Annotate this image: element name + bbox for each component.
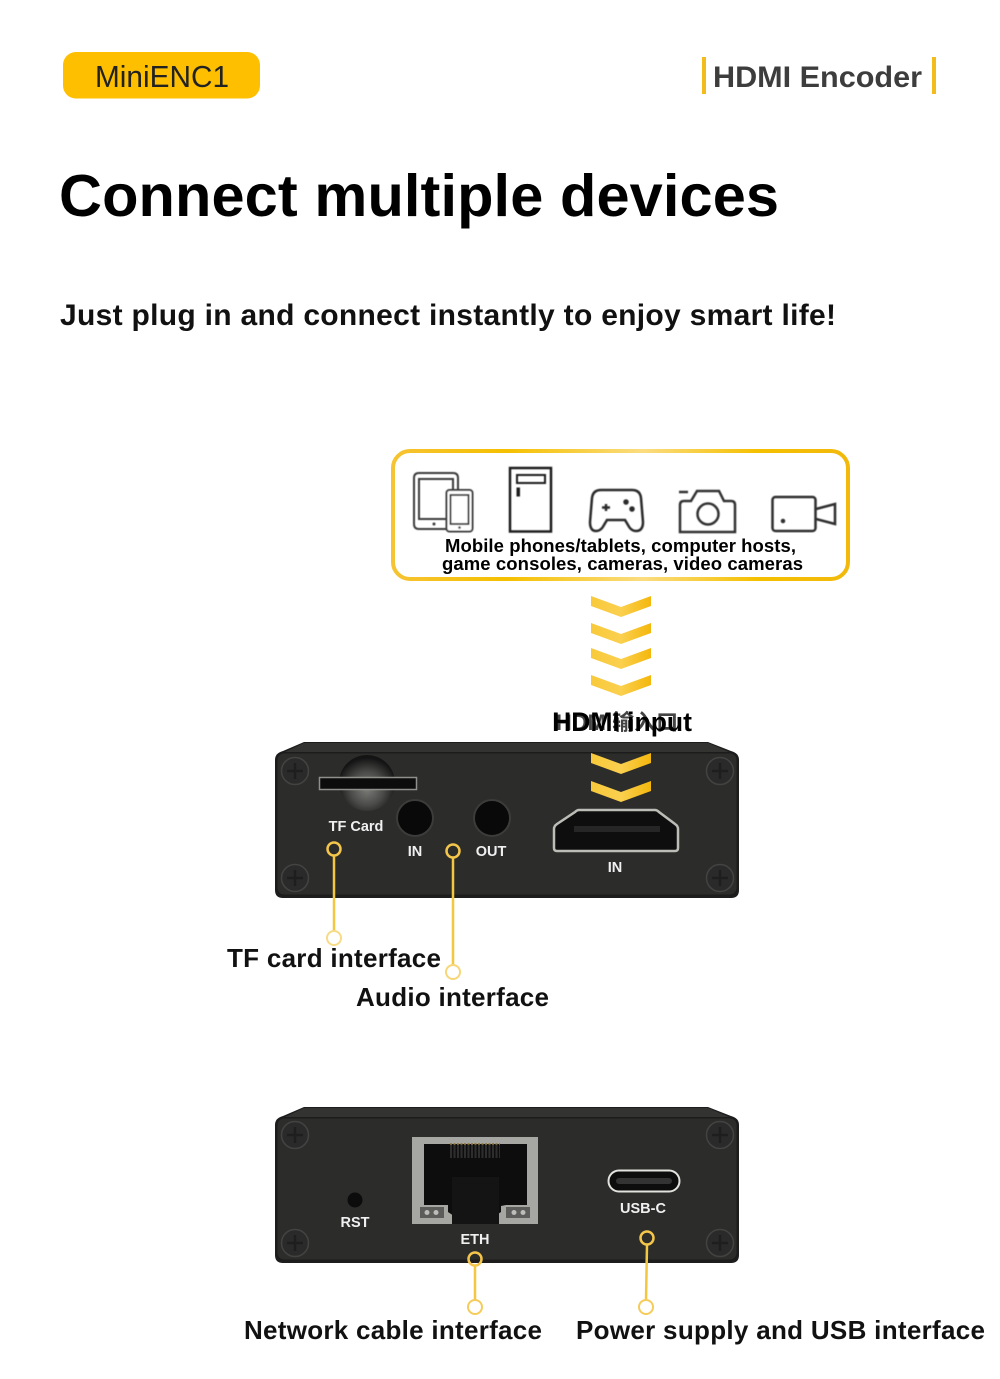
callout: audio interface <box>356 844 549 1012</box>
callout: power supply and USB interface: Power supply and USB interface <box>576 1315 985 1345</box>
screws <box>282 758 734 892</box>
panel: compatible devices <box>393 451 848 579</box>
audio IN jack <box>397 800 433 860</box>
icon: game console controller <box>590 490 643 531</box>
audio OUT jack: OUT <box>476 844 506 860</box>
HDMI port <box>554 810 678 876</box>
badge: MiniENC1 <box>63 52 260 98</box>
reset button: RST <box>340 1215 370 1231</box>
reset button <box>340 1192 370 1231</box>
icon: computer host <box>510 468 551 532</box>
arrow: downward chevrons <box>591 596 651 696</box>
screws <box>282 1122 734 1256</box>
device list text <box>442 535 803 574</box>
panel: front of device <box>275 742 739 898</box>
callout: network cable interface <box>244 1252 542 1345</box>
audio IN jack: IN <box>408 844 422 860</box>
heading: HDMI Encoder: HDMI Encoder <box>713 61 922 94</box>
title: Connect multiple devices <box>59 162 779 229</box>
callout: network cable interface: Network cable interface <box>244 1315 542 1345</box>
callout: power supply and USB interface <box>576 1232 985 1345</box>
device list text: Mobile phones/tablets, computer hosts, <box>445 535 796 556</box>
callout: TF card interface: TF card interface <box>227 943 441 973</box>
ethernet port <box>412 1137 538 1248</box>
ethernet port: ETH <box>460 1232 490 1248</box>
TF card slot: TF Card <box>329 819 383 835</box>
callout: TF card interface <box>227 842 441 973</box>
USB-C port: USB-C <box>620 1201 666 1217</box>
TF card slot <box>320 755 416 835</box>
badge: MiniENC1: MiniENC1 <box>95 59 229 94</box>
label: HDMI input: HDMI输入口 <box>556 710 678 735</box>
icon: video camera <box>772 497 835 531</box>
HDMI port: IN <box>608 860 622 876</box>
audio OUT jack <box>474 800 510 860</box>
label: HDMI input: HDMI input <box>552 707 692 737</box>
device list text: game consoles, cameras, video cameras <box>442 553 803 574</box>
icon: tablet and phone <box>414 473 472 532</box>
callout: audio interface: Audio interface <box>356 982 549 1012</box>
subtitle: Just plug in and connect instantly to enjoy smart life! <box>60 299 836 332</box>
USB-C port <box>608 1170 680 1217</box>
icon: camera <box>679 491 735 532</box>
arrow: chevrons on device <box>591 753 651 802</box>
panel: back of device <box>275 1107 739 1263</box>
